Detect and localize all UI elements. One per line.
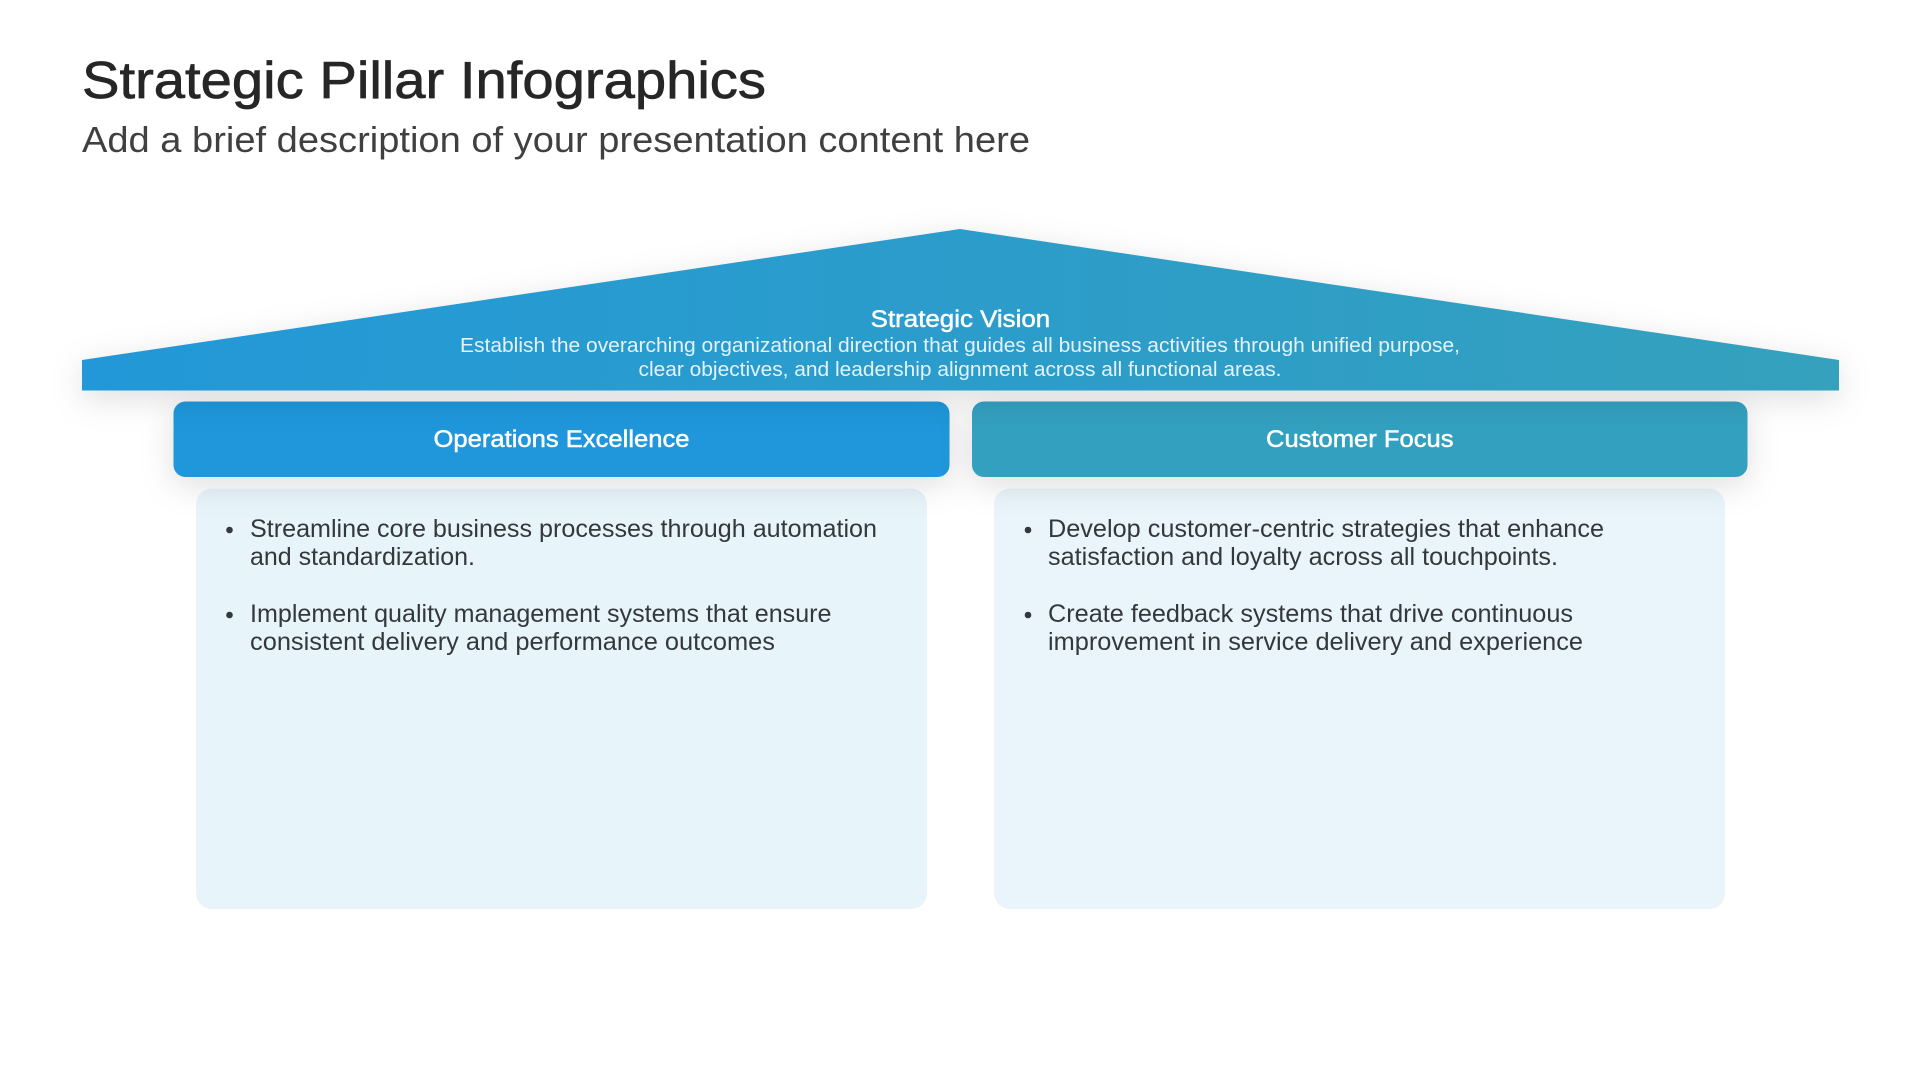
roof description: clear objectives, and leadership alignment across all functional areas.: [638, 359, 1282, 381]
bullet list: customer: Develop customer-centric strategies that enhance: [1048, 515, 1604, 543]
roof description: Establish the overarching organizational direction that guides all business activities through unified purpose,: [460, 335, 1460, 357]
bullet list: operations: Implement quality management systems that ensure: [250, 600, 832, 628]
panel: customer focus body: [994, 488, 1725, 909]
header: customer focus: Customer Focus: [1266, 426, 1454, 453]
roof heading: Strategic Vision: [871, 306, 1050, 333]
bullet list: operations: Streamline core business processes through automation: [250, 515, 877, 543]
roof: strategic vision: [82, 229, 1839, 390]
bullet list: customer: satisfaction and loyalty across all touchpoints.: [1048, 543, 1558, 571]
bullet list: operations: [226, 515, 877, 656]
header: operations excellence: Operations Excellence: [434, 426, 690, 453]
bullet list: customer: improvement in service delivery and experience: [1048, 628, 1583, 656]
panel: operations excellence body: [196, 488, 927, 909]
bullet list: operations: and standardization.: [250, 543, 475, 571]
subtitle: Add a brief description of your presentation content here: [82, 119, 1030, 160]
bullet list: customer: [1025, 515, 1604, 656]
title: Strategic Pillar Infographics: [82, 52, 766, 110]
bullet list: customer: Create feedback systems that drive continuous: [1048, 600, 1573, 628]
bullet list: operations: consistent delivery and performance outcomes: [250, 628, 775, 656]
header: operations excellence: [174, 402, 950, 477]
roof description: [460, 335, 1460, 381]
header: customer focus: [972, 402, 1748, 477]
